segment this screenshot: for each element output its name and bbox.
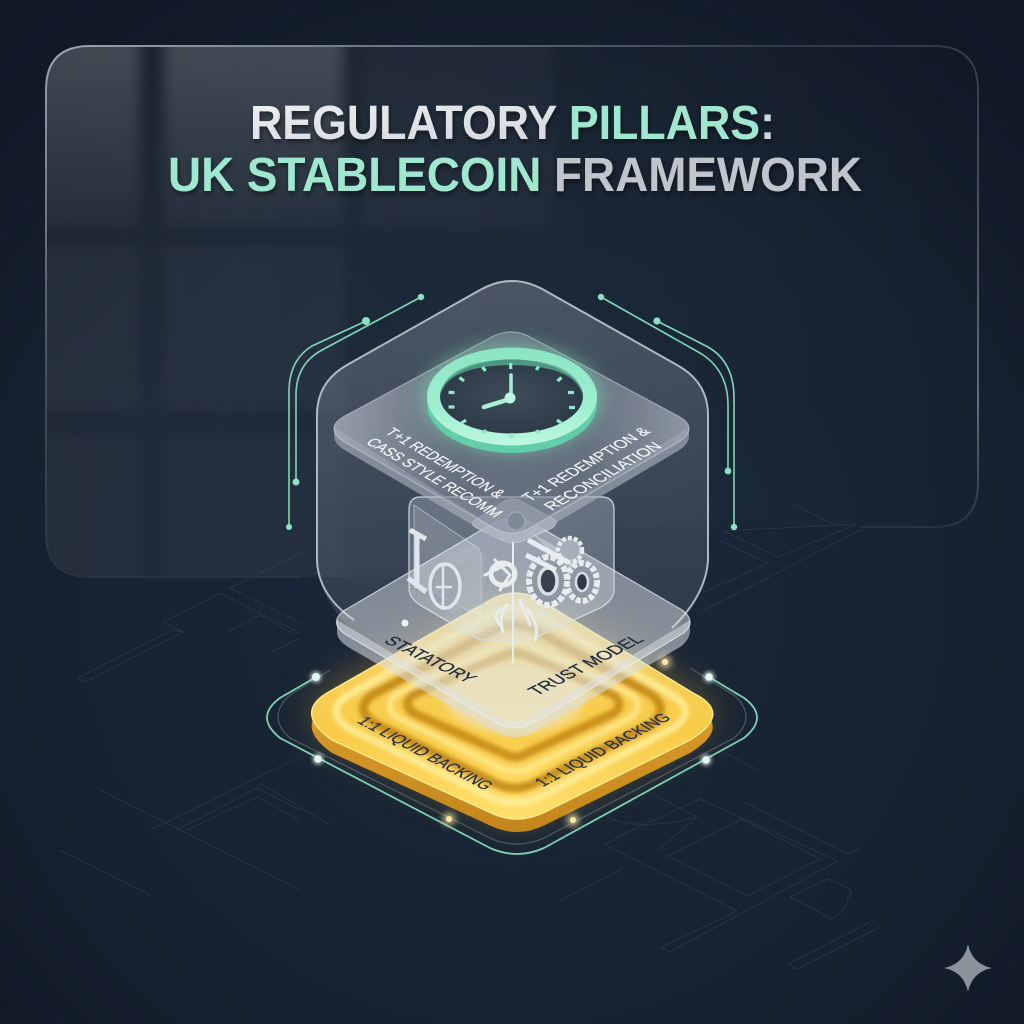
title [168, 97, 862, 202]
circuit traces right [598, 294, 737, 530]
circuit traces left [286, 294, 424, 530]
gold label right: 1:1 LIQUID BACKING [530, 710, 675, 789]
title line 1: REGULATORY PILLARS: [250, 97, 775, 150]
middle plate: statutory trust model [336, 518, 690, 737]
glass title panel [30, 30, 978, 584]
title line 2: UK STABLECOIN FRAMEWORK [168, 149, 862, 202]
blueprint floor lines [60, 502, 880, 969]
lock handle [408, 530, 478, 610]
gears [526, 532, 600, 605]
gold glow [312, 593, 713, 819]
top plate: T+1 redemption [334, 332, 689, 542]
plate label right line 2: RECONCILIATION [540, 440, 666, 513]
gold liquid backing layer [312, 593, 713, 832]
funnel cap [472, 499, 556, 542]
plate label trust model: TRUST MODEL [523, 632, 648, 698]
clock hands [484, 375, 511, 407]
gold label left: 1:1 LIQUID BACKING [353, 714, 498, 793]
clock ticks [448, 363, 575, 438]
outer rings around gold layer [267, 668, 757, 854]
outer glass shell [317, 281, 708, 730]
outer glass shell outline [317, 281, 708, 628]
small white node [402, 620, 408, 626]
plate label statutory: STATATORY [380, 633, 482, 685]
icon: four-point star [944, 944, 992, 992]
plate label right line 1: T+1 REDEMPTION & [518, 425, 654, 504]
box left face [414, 505, 481, 617]
mechanism box [408, 497, 614, 663]
icon: clock [422, 344, 602, 453]
shaft and wiring [485, 540, 536, 663]
plate label left line 2: CASS STYLE RECOMM [362, 436, 506, 520]
plate label left line 1: T+1 REDEMPTION & [381, 426, 509, 501]
dial [445, 552, 478, 608]
node dots around gold layer [310, 656, 715, 826]
